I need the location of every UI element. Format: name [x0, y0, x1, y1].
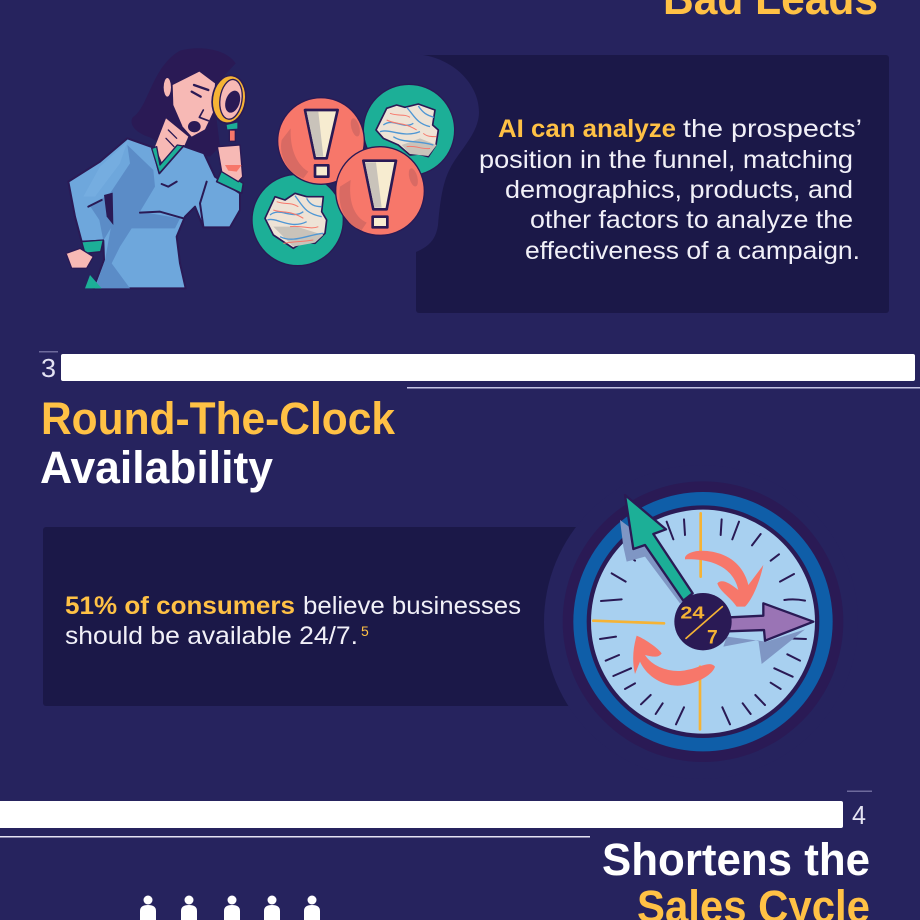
- heading: Round-The-Clock Availability: [40, 393, 396, 493]
- section 3 number: 3: [41, 353, 56, 383]
- clock hub 24/7: [674, 593, 732, 650]
- magnifier lens: [209, 73, 249, 125]
- text block: 51 percent of consumers: 51% of consumers: [65, 592, 295, 620]
- cuffs: [217, 170, 243, 193]
- clock hub 24/7: 7: [707, 627, 718, 648]
- section 4 white bar: [0, 801, 843, 828]
- illustration: woman with magnifying glass: [66, 48, 249, 288]
- hand shadows: [620, 520, 692, 603]
- collar: [152, 145, 183, 173]
- arrow: green clock hand: [625, 495, 693, 601]
- magnifier handle and hand: [229, 130, 235, 141]
- arrow: coral upper: [685, 551, 763, 607]
- icon row: people: [140, 896, 320, 920]
- arrow: purple clock hand: [728, 603, 813, 641]
- sweater shading: [95, 145, 180, 288]
- sweater: [68, 138, 240, 288]
- text block: AI can analyze: position in the funnel, matching: [479, 146, 853, 174]
- text block: AI can analyze: the prospects’: [683, 115, 862, 143]
- panel: availability text: [43, 465, 858, 779]
- panel: bad leads text: [410, 50, 889, 313]
- clock hub 24/7: 24: [680, 603, 704, 623]
- hair: [132, 48, 236, 157]
- text block: AI can analyze: AI can analyze: [498, 115, 676, 143]
- section 4 number: 4: [852, 800, 866, 830]
- neck: [155, 118, 188, 167]
- section 4 number: [847, 790, 872, 830]
- heading: Round-The-Clock Availability: Availability: [40, 442, 273, 493]
- text block: AI can analyze: other factors to analyze the: [530, 206, 853, 234]
- illustration: warning and crumpled paper circles: [252, 84, 455, 266]
- heading: Shortens the Sales Cycle: Shortens the: [602, 834, 870, 885]
- text block: 51 percent of consumers: should be available 24/7.: [65, 622, 358, 650]
- text block: 51 percent of consumers: 5: [361, 623, 369, 639]
- icon: crumpled paper bottom: [252, 174, 343, 266]
- illustration: 24/7 clock: [563, 481, 843, 762]
- icon: crumpled paper top: [363, 84, 455, 176]
- left hand: [66, 248, 93, 268]
- icon: exclamation circle 1: [278, 98, 364, 184]
- quarter markers: [593, 513, 701, 729]
- clock rings: [563, 481, 843, 762]
- text block: AI can analyze: [479, 115, 862, 265]
- face: [173, 72, 215, 137]
- text block: 51 percent of consumers: [65, 592, 521, 650]
- icon: exclamation circle 2: [336, 147, 424, 235]
- heading: Round-The-Clock Availability: Round-The-Clock: [41, 393, 396, 444]
- text block: AI can analyze: effectiveness of a campaign.: [525, 237, 860, 265]
- clock ticks: [600, 519, 806, 724]
- text block: AI can analyze: demographics, products, and: [505, 176, 853, 204]
- arm gap: [89, 193, 113, 241]
- text block: 51 percent of consumers: believe businesses: [303, 592, 521, 620]
- section 3 white bar: [61, 354, 915, 381]
- arrow: coral lower: [633, 636, 715, 686]
- heading: Shortens the Sales Cycle: [602, 834, 870, 920]
